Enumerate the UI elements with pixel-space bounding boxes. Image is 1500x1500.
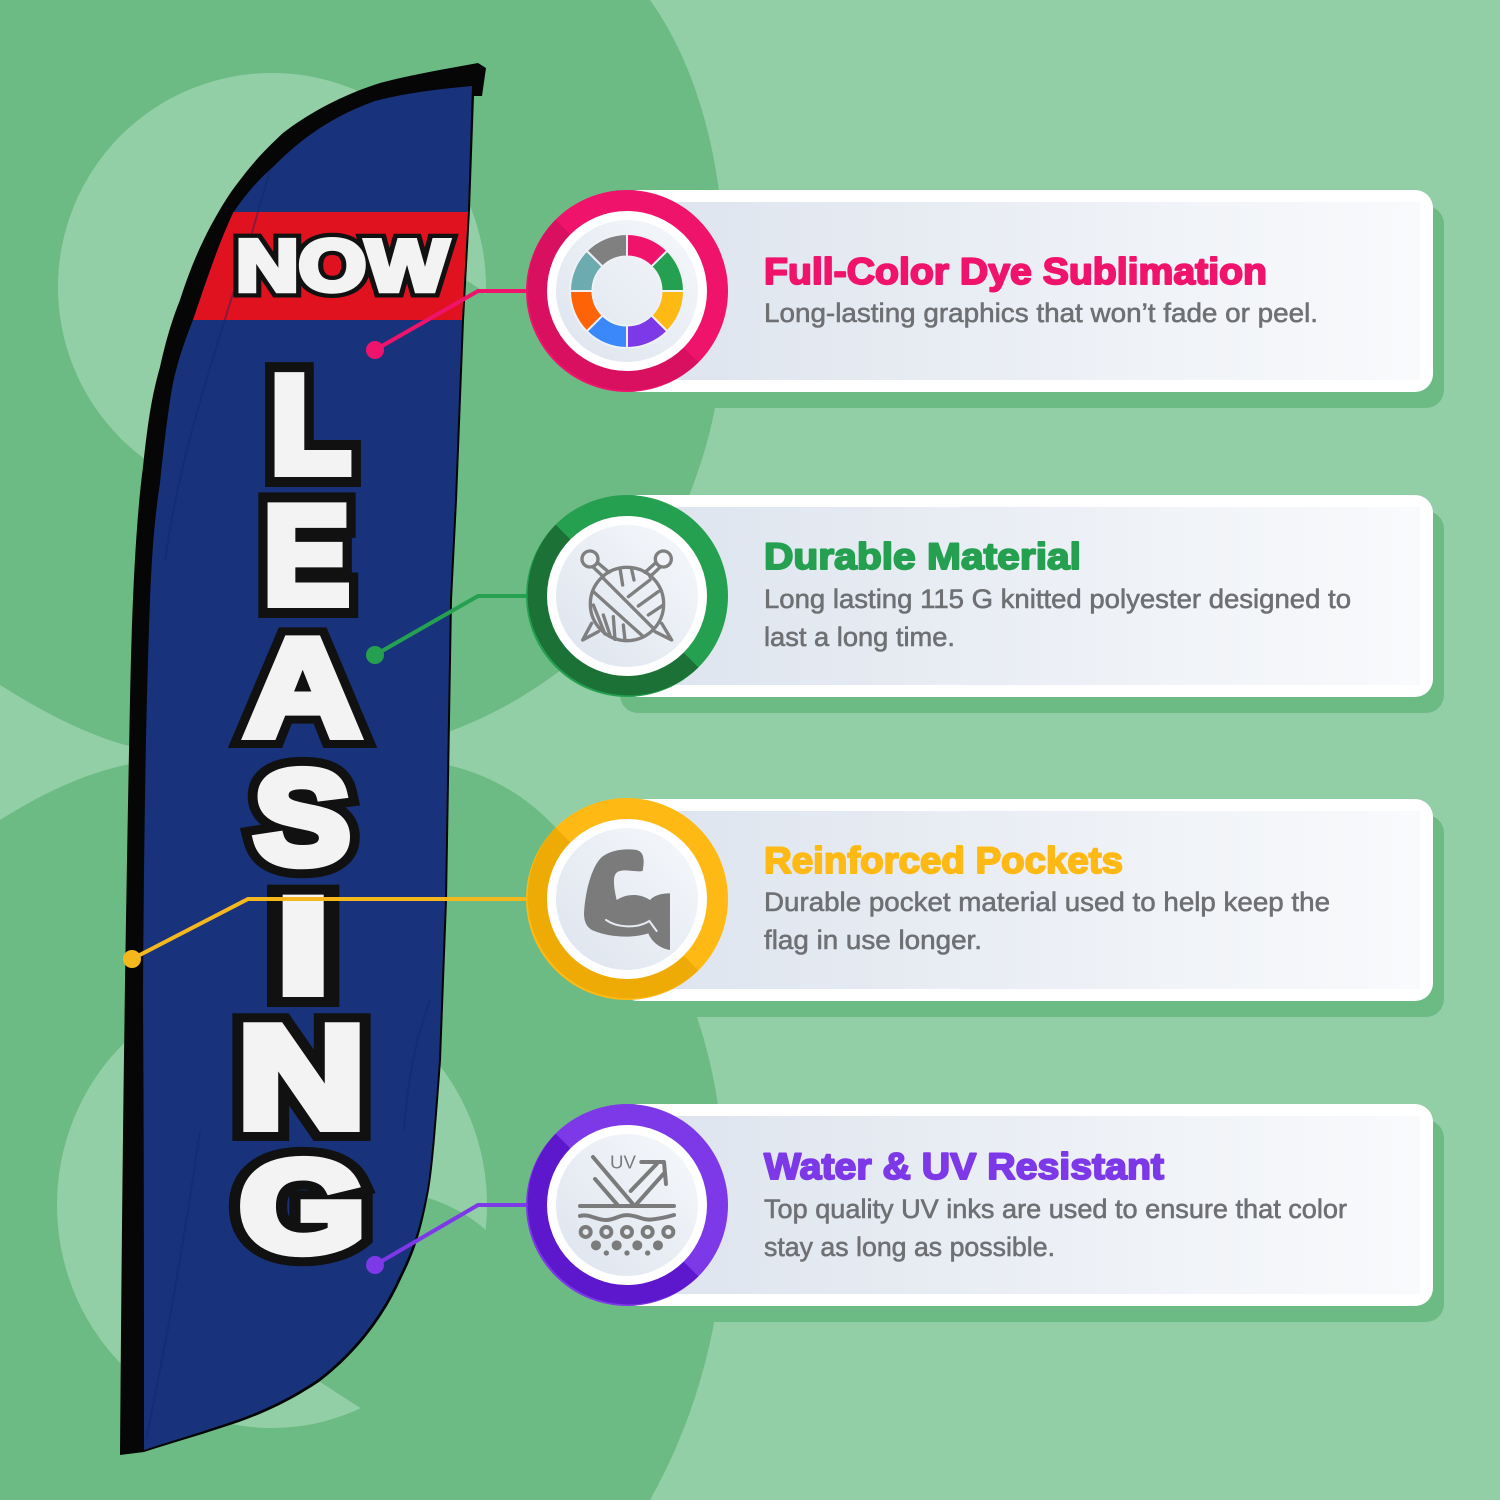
background shape: lower light circle [57, 982, 487, 1428]
ring dark half [528, 1134, 698, 1304]
ring dark half [528, 525, 698, 695]
card shadow [620, 206, 1444, 408]
flag text: LEASING: E [264, 478, 349, 633]
connector: purple [366, 1205, 530, 1274]
flag text: LEASING: L [272, 349, 350, 500]
flag red band [193, 212, 468, 320]
card shadow [620, 1120, 1444, 1322]
card 3: Reinforced Pockets [620, 799, 1444, 1017]
description: last a long time. [764, 622, 955, 652]
card body [620, 190, 1433, 392]
card body [620, 495, 1433, 697]
heading: Reinforced Pockets [764, 840, 1123, 881]
flag text: LEASING: G [240, 1135, 365, 1279]
description: Long-lasting graphics that won’t fade or peel. [764, 298, 1318, 328]
feather flag [120, 63, 486, 1455]
ring dark half [528, 828, 698, 998]
card 4: Water and UV Resistant [620, 1104, 1444, 1322]
background shape: lower circle cut [300, 1197, 500, 1425]
icon: colour wheel [558, 222, 696, 360]
flag text: LEASING: N [238, 996, 366, 1158]
icon: UV reflected from skin layers: UV [610, 1152, 636, 1173]
background shape: upper circle cut [430, 276, 500, 500]
description [764, 1194, 1347, 1262]
card inner panel [640, 811, 1420, 989]
card inner panel [640, 507, 1420, 685]
badge: muscle arm [526, 798, 728, 1000]
flag text: NOW: NOW [236, 226, 448, 306]
card shadow [620, 815, 1444, 1017]
connector: pink [366, 291, 530, 359]
background shape: upper light circle [58, 73, 486, 501]
flag text: LEASING [238, 349, 366, 1279]
badge: UV protection [526, 1104, 728, 1306]
ring light [526, 495, 728, 697]
description [764, 584, 1351, 652]
flag text: LEASING: S [254, 744, 350, 891]
connector: green [366, 596, 530, 664]
description: stay as long as possible. [764, 1232, 1055, 1262]
flag text: LEASING: E [264, 478, 349, 633]
flag text: LEASING: A [244, 610, 361, 766]
badge: colour wheel [526, 190, 728, 392]
flag text: LEASING: I [273, 867, 334, 1024]
description: Durable pocket material used to help keep the [764, 887, 1330, 917]
connector: yellow [123, 899, 530, 968]
card inner panel [640, 1116, 1420, 1294]
background shape: lower dark green blob [0, 752, 725, 1500]
card body [620, 799, 1433, 1001]
icon: yarn and needles [582, 551, 672, 641]
icon: UV reflected from skin layers [580, 1152, 674, 1256]
heading: Water & UV Resistant [764, 1146, 1164, 1187]
description: Top quality UV inks are used to ensure that color [764, 1194, 1347, 1224]
background shape: upper dark green blob [0, 0, 725, 759]
badge: yarn ball [526, 495, 728, 697]
heading: Full-Color Dye Sublimation [764, 251, 1267, 292]
flag text: LEASING: I [273, 867, 334, 1024]
ring light [526, 798, 728, 1000]
card inner panel [640, 202, 1420, 380]
flag text: LEASING: L [272, 349, 350, 500]
flag blue fabric [143, 86, 472, 1450]
flag text: LEASING: S [254, 744, 350, 891]
card 1: Full-Color Dye Sublimation [620, 190, 1444, 408]
ring dark half [528, 220, 698, 390]
flag text: LEASING: G [240, 1135, 365, 1279]
ring light [526, 190, 728, 392]
card shadow [620, 511, 1444, 713]
flag black pole sleeve [120, 63, 486, 1455]
card body [620, 1104, 1433, 1306]
flag text: LEASING: A [244, 610, 361, 766]
icon: flexed arm [584, 849, 670, 950]
description: Long lasting 115 G knitted polyester designed to [764, 584, 1351, 614]
ring light [526, 1104, 728, 1306]
flag text: LEASING: N [238, 996, 366, 1158]
description [764, 887, 1330, 955]
flag fabric folds [146, 170, 430, 1440]
description: flag in use longer. [764, 925, 982, 955]
heading: Durable Material [764, 536, 1081, 577]
flag text: NOW: NOW [236, 226, 448, 306]
card 2: Durable Material [620, 495, 1444, 713]
